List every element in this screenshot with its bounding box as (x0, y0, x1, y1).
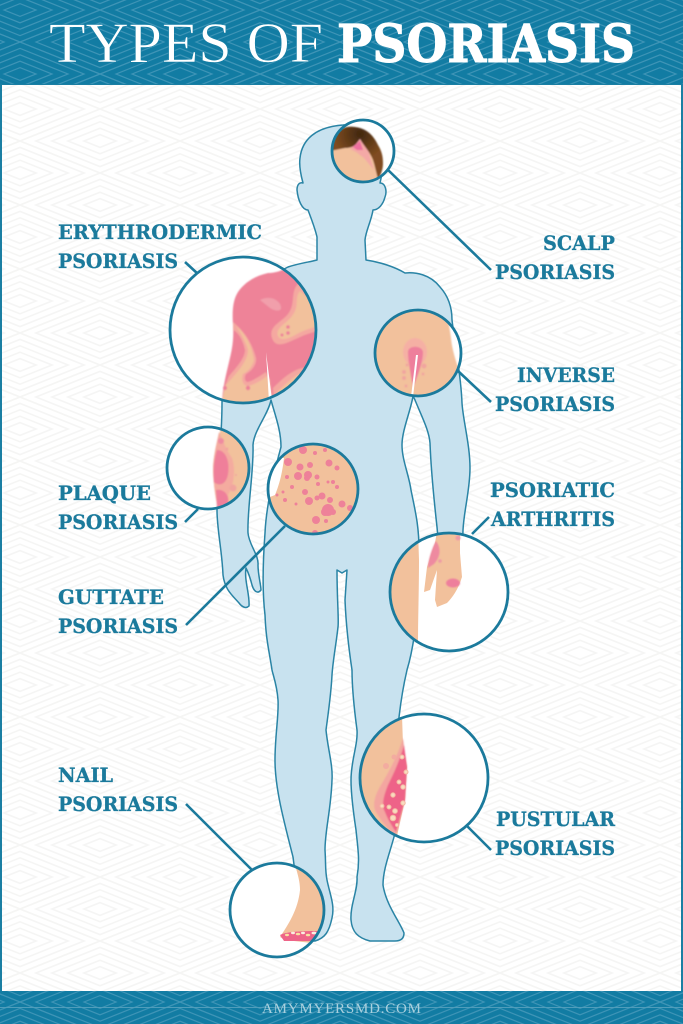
label: plaque psoriasis: PLAQUE (58, 481, 151, 505)
label: psoriatic arthritis: ARTHRITIS (490, 507, 615, 531)
footer band (0, 991, 683, 1024)
callout: inverse (370, 305, 461, 400)
label: guttate psoriasis (58, 585, 178, 638)
label: inverse psoriasis: INVERSE (517, 363, 615, 387)
label: erythrodermic psoriasis: PSORIASIS (58, 249, 178, 273)
label: scalp psoriasis: SCALP (543, 231, 615, 255)
label: plaque psoriasis (58, 481, 178, 534)
label: erythrodermic psoriasis: ERYTHRODERMIC (58, 220, 262, 244)
body silhouette (217, 125, 470, 941)
label: nail psoriasis: PSORIASIS (58, 792, 178, 816)
callout: erythrodermic (170, 257, 320, 405)
footer text: AMYMYERSMD.COM (262, 1001, 421, 1017)
label: nail psoriasis (58, 763, 178, 816)
label: inverse psoriasis: PSORIASIS (495, 392, 615, 416)
callout: scalp (328, 120, 394, 190)
header band (0, 0, 683, 84)
leader lines (185, 168, 491, 870)
label: guttate psoriasis: PSORIASIS (58, 614, 178, 638)
label: scalp psoriasis (495, 231, 615, 284)
label: nail psoriasis: NAIL (58, 763, 113, 787)
title (49, 12, 635, 75)
label: guttate psoriasis: GUTTATE (58, 585, 164, 609)
title: PSORIASIS (337, 14, 635, 75)
label: plaque psoriasis: PSORIASIS (58, 510, 178, 534)
label: pustular psoriasis (495, 807, 615, 860)
label: psoriatic arthritis (490, 478, 615, 531)
label: psoriatic arthritis: PSORIATIC (490, 478, 615, 502)
callout: plaque (167, 427, 255, 510)
callout: pustular (355, 714, 488, 842)
label: pustular psoriasis: PUSTULAR (496, 807, 615, 831)
callout: nail (230, 863, 330, 957)
label: erythrodermic psoriasis (58, 220, 262, 273)
label: pustular psoriasis: PSORIASIS (495, 836, 615, 860)
label: scalp psoriasis: PSORIASIS (495, 260, 615, 284)
label: inverse psoriasis (495, 363, 615, 416)
title: TYPES OF (49, 12, 323, 75)
callout: guttate (262, 444, 358, 536)
callout: psoriatic arthritis (385, 530, 508, 651)
